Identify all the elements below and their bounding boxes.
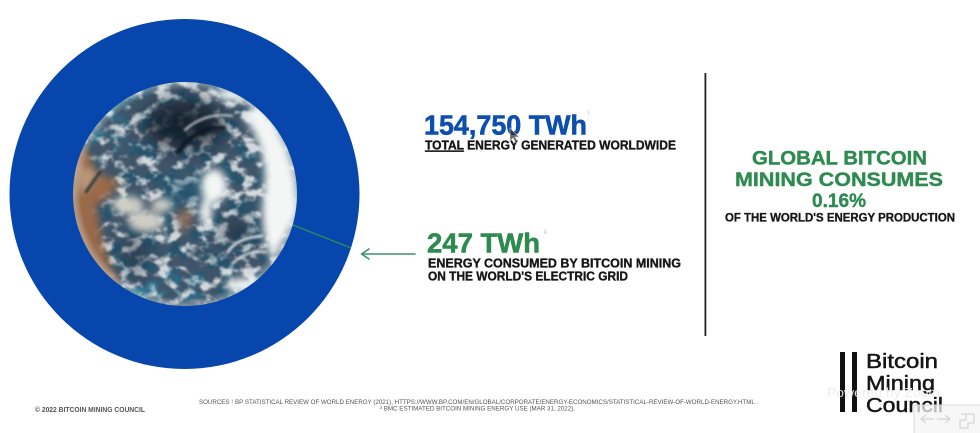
back arrow <box>921 415 934 423</box>
watermark: Powered by Zoom: Powered by Zoom <box>827 386 940 400</box>
vertical divider <box>704 73 706 336</box>
source line 2: ² BMC ESTIMATED BITCOIN MINING ENERGY USE (MAR 31, 2022). <box>380 406 575 412</box>
window icon <box>960 414 974 428</box>
blue circle background <box>10 19 360 369</box>
bitcoin label line 2: ON THE WORLD'S ELECTRIC GRID <box>428 270 628 284</box>
logo wordmark: Bitcoin <box>866 351 938 373</box>
superscript i: i <box>588 110 589 116</box>
bitcoin label line 1: ENERGY CONSUMED BY BITCOIN MINING <box>428 256 681 270</box>
logo bars <box>840 352 857 412</box>
total label: TOTAL ENERGY GENERATED WORLDWIDE <box>425 138 676 152</box>
percentage: 0.16% <box>812 190 866 212</box>
earth photo <box>68 80 300 310</box>
total TWh value: 154,750 TWh <box>424 110 587 140</box>
white cloud texture <box>70 80 300 310</box>
controls box <box>914 405 980 433</box>
conclusion line 1: GLOBAL BITCOIN <box>752 148 927 170</box>
land masses <box>68 146 194 288</box>
logo wordmark <box>866 351 943 417</box>
stat: bitcoin energy <box>427 228 681 284</box>
arrow pointing to globe <box>362 249 415 259</box>
conclusion caption: OF THE WORLD'S ENERGY PRODUCTION <box>725 212 955 224</box>
cyclone strokes <box>86 115 266 264</box>
bright cloud masses <box>200 89 298 292</box>
pointer line from globe <box>293 225 351 248</box>
logo wordmark: Mining <box>866 373 935 395</box>
bitcoin TWh value: 247 TWh <box>427 228 540 258</box>
superscript ii: ii <box>544 230 547 236</box>
dark ocean regions <box>125 101 258 279</box>
source line 1: SOURCES ¹ BP STATISTICAL REVIEW OF WORLD ENERGY (2021), HTTPS://WWW.BP.COM/EN/GLOBAL/CORPORATE/ENERGY-ECONOMICS/STATISTICAL-REVIEW-OF-WORLD-ENERGY.HTML . <box>199 399 758 406</box>
logo wordmark: Council <box>866 395 943 417</box>
cursor icon <box>510 128 519 143</box>
video controls overlay <box>914 405 980 433</box>
forward arrow <box>937 415 950 423</box>
conclusion line 2: MINING CONSUMES <box>735 169 943 191</box>
conclusion panel <box>725 148 955 224</box>
dark cloud shadow texture <box>70 80 300 310</box>
copyright: © 2022 BITCOIN MINING COUNCIL <box>35 406 146 414</box>
stat: total energy <box>424 110 676 152</box>
sources <box>199 399 758 412</box>
globe illustration <box>10 19 360 369</box>
logo: Bitcoin Mining Council <box>840 351 943 417</box>
